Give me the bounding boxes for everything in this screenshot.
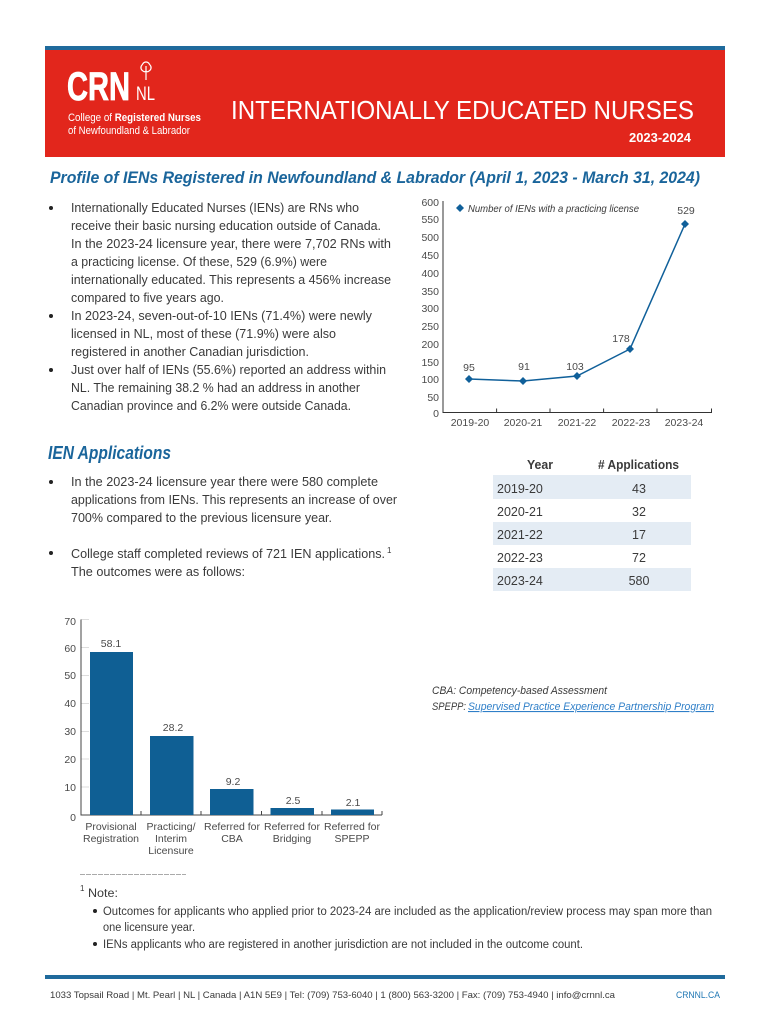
line chart: IENs with a practicing license: 400 — [421, 268, 439, 280]
text block: profile bullets: Just over half of IENs (55.6%) reported an address within — [71, 363, 386, 377]
text block: application bullets: 1 — [387, 546, 392, 555]
footnote: Outcomes for applicants who applied prior to 2023-24 are included as the application/review process may span more than — [103, 906, 712, 918]
table: applications by year: 17 — [632, 528, 646, 542]
bar chart: application outcomes: Provisional — [85, 821, 137, 833]
line chart: IENs with a practicing license: 300 — [421, 303, 439, 315]
logo: CRN NL: College of Registered Nurses — [68, 112, 201, 124]
line chart: IENs with a practicing license: 350 — [421, 286, 439, 298]
line chart: IENs with a practicing license: 91 — [518, 361, 530, 373]
bar chart: application outcomes: CBA — [221, 833, 243, 845]
bar chart: application outcomes: Practicing/ — [146, 821, 196, 833]
table: applications by year: 2020-21 — [497, 505, 543, 519]
bar chart: application outcomes: 30 — [64, 726, 76, 738]
table: applications by year: 72 — [632, 551, 646, 565]
line chart: IENs with a practicing license: 2020-21 — [504, 417, 542, 429]
footnote: 1 — [80, 884, 85, 893]
table: applications by year: # Applications — [598, 458, 679, 472]
bar chart: application outcomes: 2.5 — [286, 795, 300, 807]
text block: profile bullets: licensed in NL, most of these (71.9%) were also — [71, 327, 336, 341]
legend: abbreviations: CBA: Competency-based Assessment — [432, 685, 608, 697]
heading: IEN applications: IEN Applications — [48, 442, 171, 463]
text block: profile bullets: registered in another Canadian jurisdiction. — [71, 345, 309, 359]
line chart: IENs with a practicing license — [421, 197, 712, 429]
line chart: IENs with a practicing license: 2021-22 — [558, 417, 596, 429]
line chart: IENs with a practicing license: 50 — [427, 392, 439, 404]
footnote — [80, 884, 712, 951]
footnote: Note: — [88, 888, 118, 900]
header banner — [45, 46, 725, 157]
table: applications by year: 2022-23 — [497, 551, 543, 565]
bar chart: application outcomes: Licensure — [148, 845, 194, 857]
line chart: IENs with a practicing license: 2022-23 — [612, 417, 650, 429]
logo: CRN NL: CRN — [67, 65, 130, 109]
banner title: INTERNATIONALLY EDUCATED NURSES — [231, 95, 694, 125]
bar chart: application outcomes: 10 — [64, 782, 76, 794]
text block: application bullets: applications from IENs. This represents an increase of over — [71, 493, 397, 507]
line chart: IENs with a practicing license: Number of IENs with a practicing license — [468, 203, 639, 215]
footer: CRNNL.CA — [676, 990, 721, 1001]
bar chart: application outcomes — [64, 616, 382, 857]
bar chart: application outcomes: Referred for — [324, 821, 381, 833]
table: applications by year: 32 — [632, 505, 646, 519]
text block: profile bullets: NL. The remaining 38.2 % had an address in another — [71, 381, 360, 395]
text block: application bullets: The outcomes were as follows: — [71, 565, 245, 579]
text block: profile bullets: receive their basic nursing education outside of Canada. — [71, 219, 381, 233]
line chart: IENs with a practicing license: 500 — [421, 232, 439, 244]
text block: profile bullets: compared to five years ago. — [71, 291, 224, 305]
footnote: IENs applicants who are registered in another jurisdiction are not included in the outcome count. — [103, 939, 583, 951]
bar chart: application outcomes: Registration — [83, 833, 139, 845]
footer: 1033 Topsail Road | Mt. Pearl | NL | Canada | A1N 5E9 | Tel: (709) 753-6040 | 1 (800) 563-3200 | Fax: (709) 753-4940 | info@crnnl.ca — [50, 990, 616, 1001]
bar chart: application outcomes: SPEPP — [334, 833, 370, 845]
bar chart: application outcomes: 2.1 — [346, 797, 360, 809]
line chart: IENs with a practicing license: 2023-24 — [665, 417, 703, 429]
bar chart: application outcomes: Bridging — [273, 833, 311, 845]
line chart: IENs with a practicing license: 250 — [421, 321, 439, 333]
text block: profile bullets — [49, 201, 391, 413]
bar chart: application outcomes: 40 — [64, 698, 76, 710]
line chart: IENs with a practicing license: 103 — [566, 361, 584, 373]
bar chart: application outcomes: 20 — [64, 754, 76, 766]
line chart: IENs with a practicing license: 100 — [421, 374, 439, 386]
legend: abbreviations: Supervised Practice Experience Partnership Program — [468, 701, 714, 713]
text block: profile bullets: Canadian province and 6.2% were outside Canada. — [71, 399, 351, 413]
line chart: IENs with a practicing license: 200 — [421, 339, 439, 351]
text block: profile bullets: a practicing license. Of these, 529 (6.9%) were — [71, 255, 327, 269]
logo: CRN NL: NL — [136, 84, 155, 105]
text block: application bullets: In the 2023-24 licensure year there were 580 complete — [71, 475, 378, 489]
bar chart: application outcomes: Referred for — [264, 821, 321, 833]
banner year: 2023-2024 — [629, 131, 691, 145]
legend: abbreviations — [432, 685, 714, 713]
logo: CRN NL: of Newfoundland & Labrador — [68, 125, 190, 137]
table: applications by year: 580 — [629, 574, 649, 588]
bar chart: application outcomes: Referred for — [204, 821, 261, 833]
line chart: IENs with a practicing license: 150 — [421, 357, 439, 369]
legend: abbreviations: SPEPP: — [432, 701, 466, 713]
line chart: IENs with a practicing license: 529 — [677, 205, 695, 217]
line chart: IENs with a practicing license: 550 — [421, 214, 439, 226]
text block: profile bullets: Internationally Educated Nurses (IENs) are RNs who — [71, 201, 359, 215]
line chart: IENs with a practicing license: 178 — [612, 333, 630, 345]
line chart: IENs with a practicing license: 450 — [421, 250, 439, 262]
table: applications by year: 2019-20 — [497, 482, 543, 496]
logo: CRN NL — [67, 62, 201, 137]
heading: profile: Profile of IENs Registered in Newfoundland & Labrador (April 1, 2023 - March 31, 2024) — [50, 168, 700, 187]
line chart: IENs with a practicing license: 95 — [463, 362, 475, 374]
text block: profile bullets: internationally educated. This represents a 456% increase — [71, 273, 391, 287]
table: applications by year: 2021-22 — [497, 528, 543, 542]
text block: application bullets — [49, 475, 397, 579]
footnote: one licensure year. — [103, 922, 195, 934]
bar chart: application outcomes: 28.2 — [163, 722, 183, 734]
table: applications by year: 2023-24 — [497, 574, 543, 588]
bar chart: application outcomes: 50 — [64, 670, 76, 682]
bar chart: application outcomes: 70 — [64, 616, 76, 628]
bar chart: application outcomes: 9.2 — [226, 776, 240, 788]
text block: application bullets: College staff completed reviews of 721 IEN applications. — [71, 547, 385, 561]
line chart: IENs with a practicing license: 2019-20 — [451, 417, 489, 429]
bar chart: application outcomes: 60 — [64, 643, 76, 655]
text block: application bullets: 700% compared to the previous licensure year. — [71, 511, 332, 525]
bar chart: application outcomes: 58.1 — [101, 638, 121, 650]
table: applications by year — [493, 458, 691, 591]
line chart: IENs with a practicing license: 0 — [433, 408, 439, 420]
bar chart: application outcomes: 0 — [70, 812, 76, 824]
bar chart: application outcomes: Interim — [155, 833, 187, 845]
table: applications by year: Year — [527, 458, 553, 472]
footer — [45, 975, 725, 1001]
text block: profile bullets: In 2023-24, seven-out-of-10 IENs (71.4%) were newly — [71, 309, 373, 323]
line chart: IENs with a practicing license: 600 — [421, 197, 439, 209]
table: applications by year: 43 — [632, 482, 646, 496]
text block: profile bullets: In the 2023-24 licensure year, there were 7,702 RNs with — [71, 237, 391, 251]
